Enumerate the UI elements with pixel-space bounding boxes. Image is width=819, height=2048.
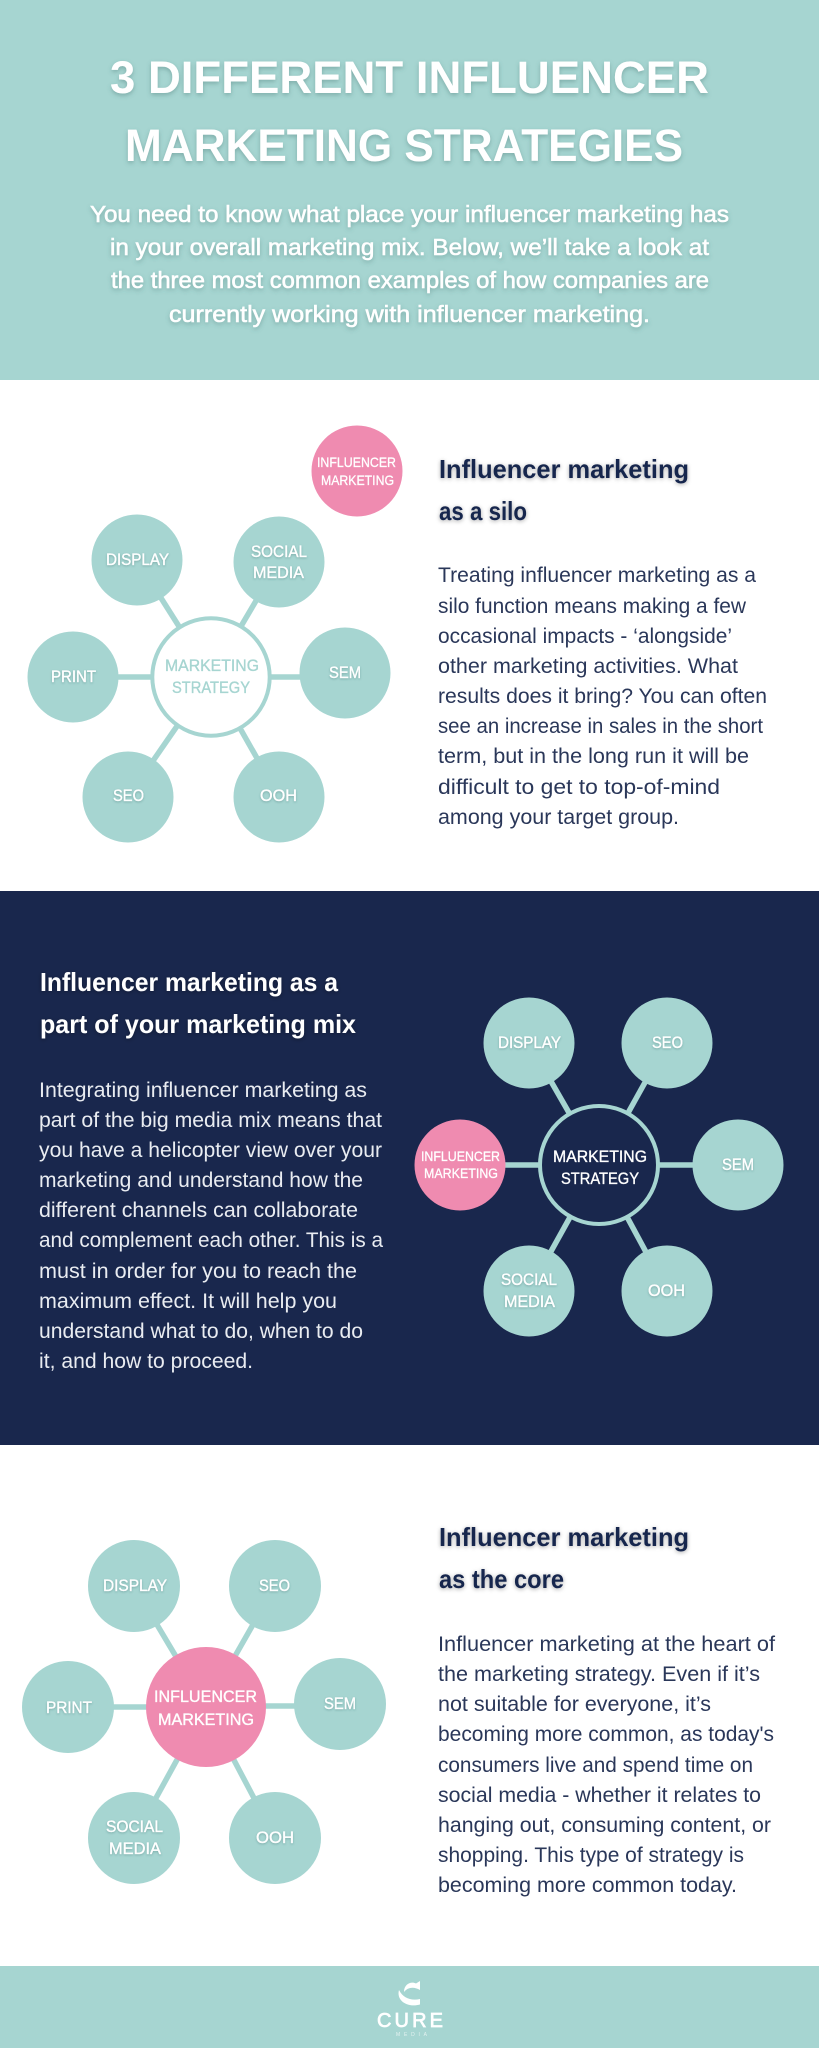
intro text: in your overall marketing mix. Below, we’ll take a look at xyxy=(110,234,710,260)
node: seo xyxy=(622,998,712,1088)
body text: silo: see an increase in sales in the short xyxy=(438,715,763,738)
center node: influencer marketing: INFLUENCER xyxy=(154,1687,257,1706)
node: display xyxy=(88,1540,180,1632)
node: print: PRINT xyxy=(46,1698,92,1717)
node: ooh: OOH xyxy=(648,1281,685,1300)
body text: silo: other marketing activities. What xyxy=(438,655,738,678)
connector lines xyxy=(460,1043,738,1291)
body text: core: Influencer marketing at the heart of xyxy=(438,1633,775,1656)
node: ooh xyxy=(234,752,324,842)
panel: footer xyxy=(0,1966,819,2048)
heading: part of your marketing mix: Influencer marketing as a xyxy=(40,967,339,997)
icon: cure media logo mark xyxy=(399,1981,420,2005)
node: display xyxy=(92,514,182,606)
heading: as a silo: as a silo xyxy=(439,496,527,526)
node: social media: MEDIA xyxy=(253,563,305,582)
body text: marketing mix: understand what to do, when to do xyxy=(39,1320,363,1343)
body text: marketing mix: maximum effect. It will help you xyxy=(39,1290,337,1313)
node: influencer marketing: MARKETING xyxy=(424,1165,498,1181)
body text: silo: Treating influencer marketing as a xyxy=(438,564,756,587)
node: social media xyxy=(88,1792,180,1884)
center node: marketing strategy: MARKETING xyxy=(165,656,259,675)
body text: marketing mix: part of the big media mix means that xyxy=(39,1109,382,1132)
node: ooh xyxy=(229,1792,321,1884)
heading: as the core xyxy=(439,1522,689,1594)
body text: silo: silo function means making a few xyxy=(438,595,747,618)
body text: marketing mix: it, and how to proceed. xyxy=(39,1350,253,1373)
node: display xyxy=(484,998,574,1088)
node: display: DISPLAY xyxy=(498,1033,561,1052)
intro text xyxy=(90,201,729,327)
body text: core: social media - whether it relates to xyxy=(438,1784,761,1807)
node: social media: SOCIAL xyxy=(501,1270,557,1289)
connector lines xyxy=(73,560,345,797)
center node: influencer marketing xyxy=(146,1647,266,1767)
body text: marketing mix: must in order for you to reach the xyxy=(39,1260,357,1283)
node: social media xyxy=(484,1246,574,1336)
panel: influencer marketing as the core xyxy=(22,1522,775,1897)
body text: core: hanging out, consuming content, or xyxy=(438,1814,771,1837)
diagram: core xyxy=(22,1540,386,1884)
panel: header xyxy=(0,0,819,380)
body text: silo: results does it bring? You can often xyxy=(438,685,767,708)
node: social media: MEDIA xyxy=(504,1292,556,1311)
node: sem xyxy=(692,1120,784,1210)
heading: part of your marketing mix: part of your marketing mix xyxy=(40,1009,357,1039)
node: sem: SEM xyxy=(329,663,361,682)
node: sem xyxy=(300,628,390,718)
logo wordmark: CURE xyxy=(377,2010,443,2032)
intro text: currently working with influencer marketing. xyxy=(169,301,650,327)
body text: silo: term, but in the long run it will be xyxy=(438,745,749,768)
heading: part of your marketing mix xyxy=(40,967,357,1039)
node: sem: SEM xyxy=(722,1155,754,1174)
panel: influencer marketing as part of your marketing mix xyxy=(0,891,819,1445)
node: seo xyxy=(82,752,174,842)
center node: influencer marketing: MARKETING xyxy=(158,1710,254,1729)
panel: influencer marketing as a silo xyxy=(28,426,767,842)
node: ooh: OOH xyxy=(256,1828,294,1847)
diagram: silo xyxy=(28,426,402,842)
heading: as the core: Influencer marketing xyxy=(439,1522,689,1552)
node: ooh: OOH xyxy=(260,786,297,805)
body text: marketing mix: you have a helicopter view over your xyxy=(39,1139,382,1162)
intro text: You need to know what place your influencer marketing has xyxy=(90,201,729,227)
body text: silo xyxy=(438,564,767,829)
heading: as a silo xyxy=(439,454,689,526)
center node: marketing strategy: MARKETING xyxy=(553,1147,647,1166)
node: sem xyxy=(294,1658,386,1750)
body text: core: the marketing strategy. Even if it’s xyxy=(438,1663,760,1686)
node: social media: SOCIAL xyxy=(251,542,307,561)
node: social media: SOCIAL xyxy=(106,1817,163,1836)
center node: marketing strategy xyxy=(152,618,270,736)
heading: as the core: as the core xyxy=(439,1564,564,1594)
body text: marketing mix xyxy=(39,1079,383,1373)
node: display: DISPLAY xyxy=(106,550,169,569)
body text: core: shopping. This type of strategy is xyxy=(438,1844,744,1867)
title xyxy=(110,52,709,171)
heading: as a silo: Influencer marketing xyxy=(439,454,689,484)
title: MARKETING STRATEGIES xyxy=(125,120,683,171)
node: display: DISPLAY xyxy=(103,1576,167,1595)
node: influencer marketing xyxy=(414,1120,506,1210)
center node: marketing strategy: STRATEGY xyxy=(172,678,250,697)
node: seo: SEO xyxy=(113,786,144,805)
body text: core: not suitable for everyone, it’s xyxy=(438,1693,711,1716)
node: sem: SEM xyxy=(324,1694,356,1713)
node: ooh xyxy=(622,1246,712,1336)
node: influencer marketing, detached: MARKETING xyxy=(321,472,394,488)
body text: silo: occasional impacts - ‘alongside’ xyxy=(438,625,732,648)
title: 3 DIFFERENT INFLUENCER xyxy=(110,52,709,103)
body text: silo: among your target group. xyxy=(438,806,679,829)
node: print xyxy=(22,1661,114,1753)
body text: core xyxy=(438,1633,775,1897)
node: influencer marketing, detached xyxy=(312,426,402,516)
body text: marketing mix: different channels can collaborate xyxy=(39,1199,358,1222)
body text: marketing mix: Integrating influencer marketing as xyxy=(39,1079,367,1102)
node: seo: SEO xyxy=(652,1033,683,1052)
body text: silo: difficult to get to top-of-mind xyxy=(438,776,720,799)
connector lines xyxy=(68,1586,340,1838)
body text: core: becoming more common today. xyxy=(438,1874,737,1897)
node: print: PRINT xyxy=(51,667,96,686)
diagram: marketing mix xyxy=(414,998,784,1336)
center node: marketing strategy xyxy=(540,1106,658,1224)
body text: core: becoming more common, as today's xyxy=(438,1723,774,1746)
center node: marketing strategy: STRATEGY xyxy=(561,1169,639,1188)
node: seo xyxy=(229,1540,321,1632)
body text: marketing mix: marketing and understand how the xyxy=(39,1169,363,1192)
body text: marketing mix: and complement each other. This is a xyxy=(39,1229,383,1252)
logo wordmark: MEDIA xyxy=(396,2032,428,2038)
node: print xyxy=(28,632,118,722)
node: social media xyxy=(234,516,324,608)
node: influencer marketing, detached: INFLUENCER xyxy=(317,454,396,470)
body text: core: consumers live and spend time on xyxy=(438,1754,753,1777)
intro text: the three most common examples of how companies are xyxy=(111,267,709,293)
node: influencer marketing: INFLUENCER xyxy=(421,1148,500,1164)
node: social media: MEDIA xyxy=(109,1839,162,1858)
node: seo: SEO xyxy=(259,1576,290,1595)
